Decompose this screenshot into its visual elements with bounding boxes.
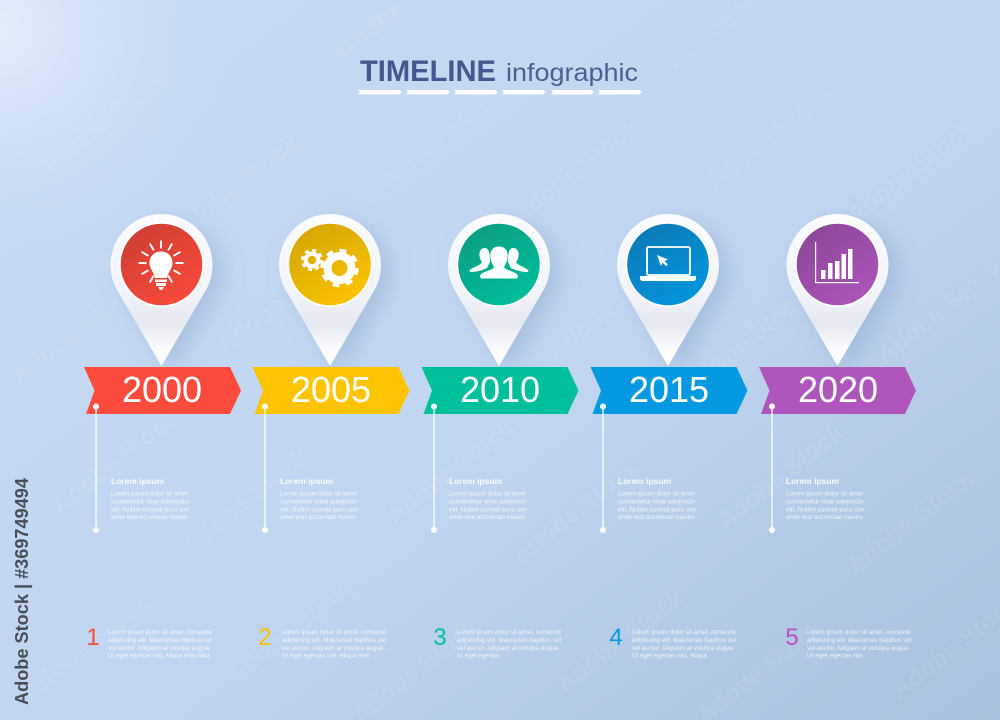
stock watermarks: Adobe Stock [506, 114, 644, 230]
description: 2020: amet erat accumsan maxim. [786, 514, 864, 521]
year: 2000: 2000 [122, 369, 202, 410]
description: 2015: Lorem ipsum [618, 476, 671, 486]
description: 2010: amet erat accumsan maxim. [449, 514, 527, 521]
note 3 [433, 624, 561, 660]
year: 2015: 2015 [629, 369, 709, 410]
note 2 text: Lorem ipsum dolor sit amet, consecte [282, 629, 386, 636]
title [360, 55, 638, 88]
description: 2000: elit. Nullim convali puru sim [111, 506, 189, 514]
note 5 text: adipiscing elit. Maecenas dapibus vel [807, 637, 911, 644]
pin: 2005 [279, 214, 381, 366]
description: 2020: consectetur vitae adepiscin [786, 498, 863, 506]
stock watermarks: Adobe Stock [841, 114, 979, 230]
vertical stock id: Adobe Stock | #369749494 [12, 478, 32, 705]
step 2015 [590, 214, 748, 533]
connector line: 2005 [262, 404, 268, 533]
stock watermarks: Adobe Stock [16, 589, 154, 705]
step 2020 [759, 214, 916, 533]
description: 2005: amet erat accumsan maxim. [280, 514, 358, 521]
stock watermarks: Adobe Stock [506, 454, 644, 570]
pin: 2020 [786, 214, 888, 366]
note 5 text: Lorem ipsum dolor sit amet, consecte [807, 629, 911, 636]
note 3 text: Lorem ipsum dolor sit amet, consecte [457, 629, 561, 636]
title: infographic [506, 59, 638, 87]
description: 2010 [449, 476, 527, 521]
connector line: 2010 [431, 404, 437, 533]
note 1 text: adipiscing elit. Maecenas dapibus vel [108, 637, 212, 644]
connector line: 2020 [769, 404, 775, 533]
note 1 [86, 624, 212, 660]
description: 2005: consectetur vitae adepiscin [280, 498, 357, 506]
description: 2020: elit. Nullim convali puru sim [786, 506, 864, 514]
year: 2005: 2005 [291, 369, 371, 410]
title arrow dashes [358, 90, 642, 94]
description: 2010: consectetur vitae adepiscin [449, 498, 526, 506]
note 5 text: vel auctor. Aliquam at volutpa augue. [807, 645, 910, 652]
icon: bar chart [815, 242, 859, 283]
stock watermarks: Adobe Stock [841, 464, 979, 580]
stock watermarks: Adobe Stock [36, 64, 174, 180]
icon: laptop [640, 247, 696, 281]
icon: light bulb [138, 240, 184, 290]
title: TIMELINE [360, 55, 496, 88]
description: 2000: Lorem ipsum [111, 476, 164, 486]
description: 2005: elit. Nullim convali puru sim [280, 506, 358, 514]
stock watermarks: Adobe Stock [676, 284, 814, 400]
icon: people [470, 246, 528, 278]
description: 2015: elit. Nullim convali puru sim [618, 506, 696, 514]
note 4 text: Ut eget egestas nisl. Aliqua [632, 652, 707, 660]
year ribbon: 2010 [422, 367, 578, 414]
note 5 text [807, 629, 911, 660]
note 3 text [457, 629, 561, 660]
description: 2000 [111, 476, 189, 521]
description: 2000: Lorem ipsum dolor sit amet [111, 490, 188, 498]
note 2 text: vel auctor. Aliquam at volutpa augue. [282, 645, 385, 652]
pin: 2010 [448, 214, 550, 366]
description: 2015: consectetur vitae adepiscin [618, 498, 695, 506]
stock watermarks: Adobe Stock [541, 249, 679, 365]
description: 2000: amet erat accumsan maxim. [111, 514, 189, 521]
number 1: 1 [86, 624, 100, 651]
note 3 text: Ut eget egestas [457, 652, 501, 660]
description: 2000: consectetur vitae adepiscin [111, 498, 188, 506]
description: 2015: amet erat accumsan maxim. [618, 514, 696, 521]
description: 2015 [618, 476, 696, 521]
year ribbon: 2000 [84, 367, 241, 414]
note 4 text: vel auctor. Aliquam at volutpa augue. [632, 645, 735, 652]
number 3: 3 [433, 624, 447, 651]
note 1 text: Lorem ipsum dolor sit amet, consecte [108, 629, 212, 636]
note 4 [609, 624, 736, 660]
note 1 text [108, 629, 212, 660]
year: 2020: 2020 [798, 369, 878, 410]
step 2005 [252, 214, 410, 533]
description: 2020 [786, 476, 864, 521]
icon: gears [302, 250, 356, 285]
description: 2005: Lorem ipsum dolor sit amet [280, 490, 357, 498]
year ribbon: 2020 [759, 367, 916, 414]
stock watermarks: Adobe Stock [701, 79, 839, 195]
note 1 text: vel auctor. Aliquam at volutpa augue. [108, 645, 211, 652]
description: 2020: Lorem ipsum [786, 476, 839, 486]
stock watermarks: Adobe Stock [211, 244, 349, 360]
stock watermarks: Adobe Stock [6, 274, 144, 390]
year ribbon: 2015 [590, 367, 748, 414]
note 5 text: Ut eget egestas nis [807, 652, 863, 660]
description: 2005: Lorem ipsum [280, 476, 333, 486]
note 3 text: vel auctor. Aliquam at volutpa augue. [457, 645, 560, 652]
stock watermarks: Adobe Stock [711, 419, 849, 535]
pin: 2000 [110, 214, 212, 366]
number 5: 5 [785, 624, 799, 651]
stock watermarks: Adobe Stock [381, 414, 519, 530]
description: 2010: Lorem ipsum [449, 476, 502, 486]
pin: 2015 [617, 214, 719, 366]
note 4 text [632, 629, 736, 660]
stock watermarks: Adobe Stock [221, 574, 359, 690]
note 2 text: Ut eget egestas nisl. Aliqua erat [282, 652, 369, 660]
note 5 [785, 624, 911, 660]
note 2 text: adipiscing elit. Maecenas dapibus vel [282, 637, 386, 644]
note 2 text [282, 629, 386, 660]
note 4 text: Lorem ipsum dolor sit amet, consecte [632, 629, 736, 636]
description: 2005 [280, 476, 358, 521]
stock watermarks: Adobe Stock [176, 444, 314, 560]
description: 2010: elit. Nullim convali puru sim [449, 506, 527, 514]
stock watermarks: Adobe Stock [551, 584, 689, 700]
description: 2015: Lorem ipsum dolor sit amet [618, 490, 695, 498]
note 2 [258, 624, 386, 660]
connector line: 2000 [93, 404, 99, 533]
number 4: 4 [609, 624, 623, 651]
note 1 text: Ut eget egestas nisl. Aliqua erat volut. [108, 652, 211, 660]
step 2000 [84, 214, 241, 533]
note 4 text: adipiscing elit. Maecenas dapibus vel [632, 637, 736, 644]
description: 2010: Lorem ipsum dolor sit amet [449, 490, 526, 498]
step 2010 [422, 214, 578, 533]
stock watermarks: Adobe Stock [166, 129, 304, 245]
year ribbon: 2005 [252, 367, 410, 414]
connector line: 2015 [600, 404, 606, 533]
description: 2020: Lorem ipsum dolor sit amet [786, 490, 863, 498]
number 2: 2 [258, 624, 272, 651]
stock watermarks: Adobe Stock [46, 404, 184, 520]
year: 2010: 2010 [460, 369, 540, 410]
stock watermarks: Adobe Stock [371, 79, 509, 195]
note 3 text: adipiscing elit. Maecenas dapibus vel [457, 637, 561, 644]
